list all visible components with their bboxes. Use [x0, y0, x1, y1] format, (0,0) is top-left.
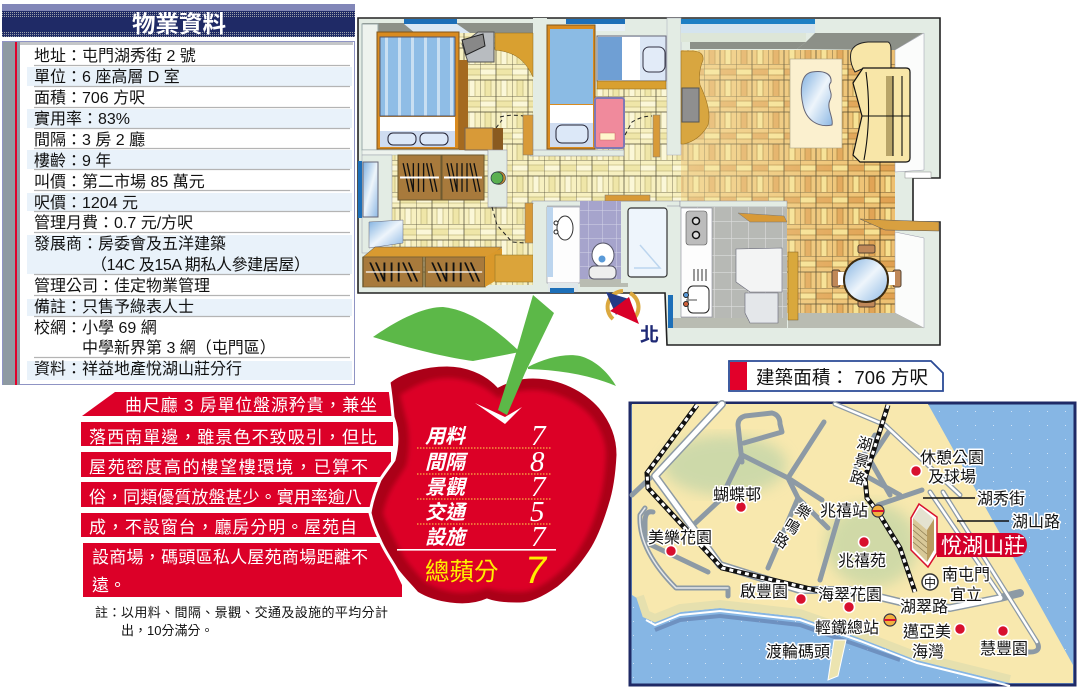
map labels: 美樂花園: [648, 529, 712, 547]
map labels: 及球場: [928, 468, 976, 486]
map labels: 兆禧站: [820, 502, 868, 520]
map labels: 蝴蝶邨: [713, 486, 761, 504]
score rows: 設施: [425, 526, 468, 549]
bathroom: [533, 201, 667, 293]
property data rows: 中學新界第 3 網（屯門區）: [82, 338, 276, 357]
apple body: [370, 365, 618, 605]
panel: property data: [2, 4, 355, 385]
map labels: 湖秀街: [977, 490, 1025, 508]
property data rows: 間隔：3 房 2 廳: [34, 130, 145, 149]
land: [632, 404, 1073, 683]
commentary panel: 屋苑密度高的樓望樓環境，已算不: [89, 457, 368, 477]
property data rows: 資料：祥益地產悅湖山莊分行: [34, 360, 242, 378]
property data rows: 單位：6 座高層 D 室: [34, 68, 180, 86]
map labels: 啟豐園: [740, 583, 788, 601]
map labels: 慧豐園: [980, 640, 1028, 658]
commentary panel: 設商場，碼頭區私人屋苑商場距離不: [92, 548, 368, 567]
score rows: 景觀: [425, 477, 468, 499]
property data rows: 管理月費：0.7 元/方呎: [34, 213, 193, 232]
railway: [647, 405, 915, 597]
north label: 北: [640, 324, 659, 346]
total score: 7: [525, 550, 548, 592]
commentary panel: 落西南單邊，雖景色不致吸引，但比: [89, 428, 377, 447]
footnote: [95, 605, 388, 638]
property data rows: 面積：706 方呎: [34, 89, 145, 107]
kitchen: [681, 207, 798, 323]
secondary school marker: [922, 574, 938, 590]
total score: [425, 550, 548, 592]
footnote: 註：: [95, 605, 121, 620]
building marker: [911, 504, 937, 567]
compass: [606, 291, 639, 324]
commentary panel: 俗，同類優質放盤甚少。實用率逾八: [89, 488, 362, 507]
map labels: 鳴: [781, 516, 803, 538]
property data rows: 發展商：房委會及五洋建築: [34, 235, 226, 253]
property data rows: （14C 及15A 期私人參建居屋）: [91, 256, 310, 274]
walls and window strips: [362, 18, 939, 328]
score rows: 用料: [425, 426, 467, 448]
chevron: [475, 403, 522, 424]
property data rows: [34, 47, 310, 378]
map labels: 海灣: [912, 643, 944, 661]
apple score chart: [370, 295, 618, 605]
commentary panel: [81, 392, 402, 597]
apple inner: [383, 378, 606, 593]
property data rows: 校網：小學 69 網: [34, 319, 157, 337]
property data rows: 樓齡：9 年: [34, 152, 111, 170]
score rows: 8: [530, 446, 545, 478]
footnote: 出，10分滿分。: [121, 623, 213, 638]
location map: [630, 403, 1075, 686]
map labels: 路: [770, 530, 792, 552]
property data rows: 管理公司：佳定物業管理: [34, 276, 210, 295]
dining table: [832, 245, 901, 307]
score rows: 交通: [425, 501, 468, 524]
commentary panel: 遠。: [92, 576, 126, 595]
map labels: 路: [848, 468, 867, 489]
living room furniture: [681, 42, 910, 307]
total score: 總蘋分: [425, 558, 498, 586]
property data rows: 呎價：1204 元: [34, 194, 138, 212]
map labels: 湖翠路: [900, 598, 948, 616]
building name badge: 悅湖山莊: [941, 535, 1025, 558]
map labels: 兆禧苑: [838, 552, 886, 570]
map labels: 宜立: [950, 586, 982, 604]
map labels: 樂: [792, 501, 814, 523]
map labels: 南屯門: [942, 566, 990, 584]
map labels: 休憩公園: [920, 449, 984, 467]
leaf right: [528, 355, 616, 386]
property data rows: 叫價：第二市場 85 萬元: [34, 172, 205, 191]
legend: built area: 建築面積： 706 方呎: [756, 367, 928, 388]
bedroom two with bed and wardrobe: [547, 25, 666, 157]
floor plan: [358, 18, 940, 346]
property data rows: 地址：屯門湖秀街 2 號: [34, 47, 196, 65]
leaf left: [373, 307, 520, 361]
commentary panel: 成，不設窗台，廳房分明。屋苑自: [89, 518, 357, 537]
map labels: 邁亞美: [903, 623, 951, 641]
divider lines: [417, 448, 552, 524]
commentary panel: 曲尺廳 3 房單位盤源矜貴，兼坐: [125, 396, 377, 415]
map labels: 景: [852, 451, 871, 472]
street callout lines: [923, 498, 1009, 521]
score rows: [425, 420, 547, 553]
score rows: 7: [531, 521, 547, 553]
bedroom one with bed: [377, 32, 533, 155]
property data rows: 實用率：83%: [34, 109, 130, 128]
map labels: 湖山路: [1012, 513, 1060, 531]
map labels: 湖: [855, 434, 874, 455]
heading: property data: 物業資料: [132, 11, 226, 37]
storage room with wardrobes: [358, 150, 650, 287]
property data rows: 備註：只售予綠表人士: [34, 298, 194, 316]
footnote: 以用料、間隔、景觀、交通及設施的平均分計: [121, 605, 388, 620]
station markers: [872, 505, 896, 626]
stem: [498, 295, 554, 415]
map labels: 輕鐵總站: [815, 619, 879, 637]
score rows: 7: [531, 471, 547, 503]
location markers: [666, 466, 1008, 636]
secondary school marker: 中: [924, 575, 936, 590]
legend: built area: [729, 361, 943, 391]
score rows: 7: [531, 420, 547, 452]
floors: [392, 33, 895, 313]
score rows: 5: [530, 496, 544, 528]
roads: [632, 404, 1038, 652]
map labels: 海翠花園: [818, 586, 882, 604]
score rows: 間隔: [425, 452, 469, 474]
map labels: [648, 434, 1060, 661]
map labels: 渡輪碼頭: [766, 643, 830, 661]
